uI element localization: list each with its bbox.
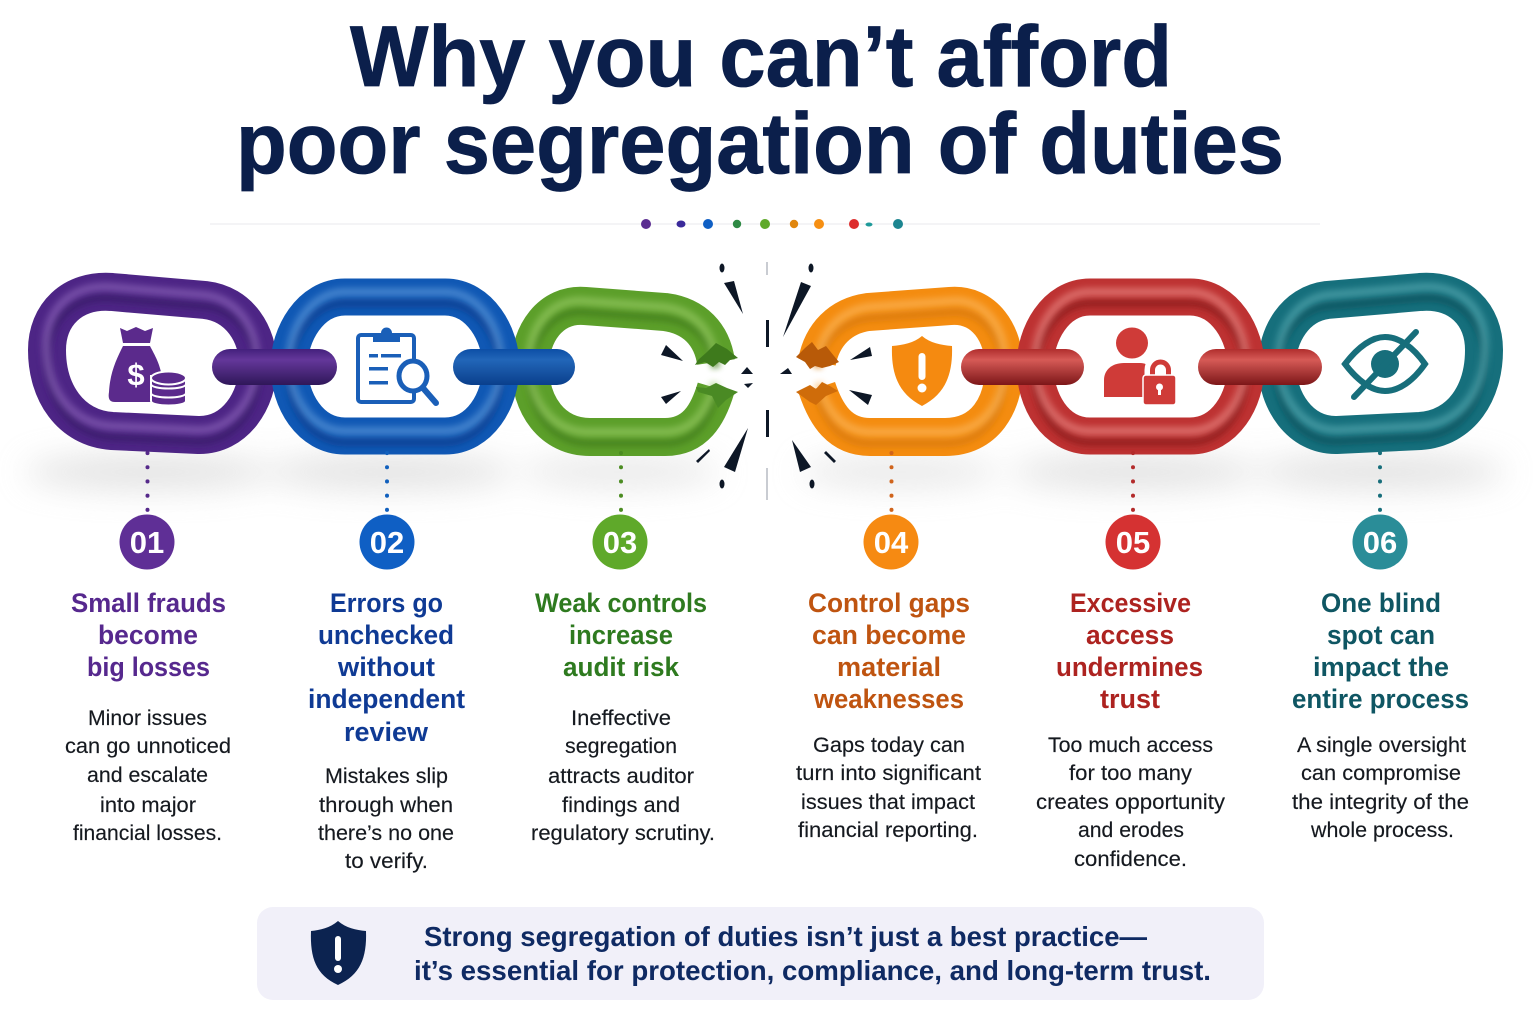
heading 06 — [1292, 588, 1469, 714]
body 04: turn into significant — [796, 761, 981, 785]
heading 06: impact the — [1313, 652, 1449, 682]
heading 02: Errors go — [330, 588, 443, 618]
connector bar: blue — [453, 349, 575, 385]
connector bar: purple — [212, 349, 337, 385]
chain link 3: green broken — [529, 301, 738, 443]
connector bar: red left — [961, 349, 1084, 385]
burst at chain break — [661, 262, 872, 500]
chain link 4: orange broken — [796, 301, 1005, 443]
body 04: Gaps today can — [813, 733, 965, 757]
broken end: orange top — [796, 342, 839, 369]
body 06: the integrity of the — [1292, 790, 1469, 814]
icon: money bag and coins — [109, 327, 186, 406]
icon: money bag and coins: $ — [127, 357, 145, 392]
badge 05: 05 — [1116, 525, 1150, 560]
body 01: financial losses. — [73, 821, 222, 845]
heading 05: Excessive — [1070, 588, 1191, 618]
badge 03 — [592, 514, 648, 570]
body 03 — [531, 706, 715, 845]
body 02 — [318, 764, 454, 873]
heading 02: unchecked — [318, 620, 454, 650]
heading 04 — [808, 588, 970, 714]
chain link 2: blue — [289, 292, 501, 442]
heading 03: Weak controls — [535, 588, 707, 618]
title: Why you can’t afford — [350, 9, 1172, 105]
body 01: Minor issues — [88, 706, 207, 730]
dotted connector: 01 — [146, 453, 150, 510]
dotted connector: 03 — [619, 453, 623, 510]
divider dots — [641, 219, 903, 229]
heading 02 — [308, 588, 465, 747]
banner text: it’s essential for protection, compliance, and long-term trust. — [414, 955, 1211, 986]
body 06: whole process. — [1310, 818, 1454, 842]
badge 02 — [360, 514, 414, 570]
body 06 — [1292, 733, 1469, 842]
heading 06: One blind — [1321, 588, 1441, 618]
heading 06: entire process — [1292, 684, 1469, 714]
icon: banner shield — [311, 921, 366, 985]
dotted connector: 05 — [1131, 453, 1135, 510]
body 01: can go unnoticed — [65, 734, 231, 758]
column 03 — [531, 514, 715, 845]
heading 01 — [71, 588, 226, 682]
banner text — [414, 921, 1211, 986]
title: poor segregation of duties — [236, 96, 1284, 192]
body 02: to verify. — [345, 849, 428, 873]
banner text: Strong segregation of duties isn’t just a best practice— — [424, 921, 1147, 952]
badge 04 — [864, 514, 918, 570]
badge 02: 02 — [370, 525, 404, 560]
badge 05 — [1106, 514, 1160, 570]
heading 05: access — [1086, 620, 1174, 650]
title — [236, 9, 1284, 192]
body 03: findings and — [562, 793, 680, 817]
heading 03 — [535, 588, 707, 682]
body 02: through when — [319, 793, 453, 817]
heading 03: audit risk — [563, 652, 680, 682]
chain shadow — [25, 455, 1505, 489]
body 03: Ineffective — [571, 706, 671, 730]
badge 04: 04 — [874, 525, 909, 560]
heading 04: weaknesses — [813, 684, 964, 714]
dotted connector: 06 — [1378, 453, 1382, 510]
body 05: and erodes — [1078, 818, 1184, 842]
dotted connector: 04 — [890, 453, 894, 510]
body 05: creates opportunity — [1036, 790, 1225, 814]
column 02 — [308, 514, 465, 873]
broken end: green top — [695, 343, 738, 367]
body 02: there’s no one — [318, 821, 454, 845]
column 01 — [65, 514, 231, 845]
callout banner — [257, 907, 1264, 1000]
body 04: issues that impact — [801, 790, 975, 814]
badge 06 — [1352, 514, 1408, 570]
heading 04: can become — [812, 620, 966, 650]
body 05: confidence. — [1074, 847, 1187, 871]
body 06: can compromise — [1301, 761, 1461, 785]
body 05: for too many — [1069, 761, 1192, 785]
heading 01: big losses — [87, 652, 210, 682]
badge 06: 06 — [1363, 525, 1397, 560]
column 04 — [796, 514, 981, 842]
heading 03: increase — [569, 620, 673, 650]
heading 01: become — [98, 620, 198, 650]
body 04 — [796, 733, 981, 842]
chain link 5: red — [1035, 292, 1246, 442]
body 04: financial reporting. — [798, 818, 978, 842]
heading 04: material — [837, 652, 941, 682]
badge 01: 01 — [130, 525, 164, 560]
column 06 — [1292, 514, 1469, 842]
heading 05: undermines — [1056, 652, 1203, 682]
body 01 — [65, 706, 231, 845]
badge 01 — [120, 514, 174, 570]
badge 03: 03 — [603, 525, 637, 560]
body 02: Mistakes slip — [325, 764, 448, 788]
body 03: attracts auditor — [548, 764, 694, 788]
heading 05: trust — [1100, 684, 1160, 714]
broken end: orange bottom — [796, 382, 838, 405]
column 05 — [1036, 514, 1225, 871]
body 06: A single oversight — [1297, 733, 1466, 757]
chain link 1: purple — [46, 287, 258, 441]
icon: person with lock — [1104, 328, 1176, 405]
heading 01: Small frauds — [71, 588, 226, 618]
dotted connector: 02 — [385, 453, 389, 510]
heading 02: review — [344, 717, 429, 747]
icon: crossed-out eye — [1345, 332, 1425, 397]
body 05: Too much access — [1048, 733, 1213, 757]
heading 05 — [1056, 588, 1203, 714]
heading 06: spot can — [1327, 620, 1435, 650]
broken end: green bottom — [696, 383, 738, 408]
body 01: and escalate — [87, 763, 208, 787]
heading 02: without — [337, 652, 435, 682]
heading 04: Control gaps — [808, 588, 970, 618]
heading 02: independent — [308, 684, 465, 714]
connector bar: red right — [1198, 349, 1322, 385]
body 05 — [1036, 733, 1225, 871]
body 01: into major — [100, 793, 196, 817]
icon: clipboard with magnifier — [358, 328, 436, 403]
body 03: regulatory scrutiny. — [531, 821, 715, 845]
chain link 6: teal — [1277, 287, 1485, 441]
icon: warning shield — [892, 336, 952, 406]
body 03: segregation — [565, 734, 677, 758]
